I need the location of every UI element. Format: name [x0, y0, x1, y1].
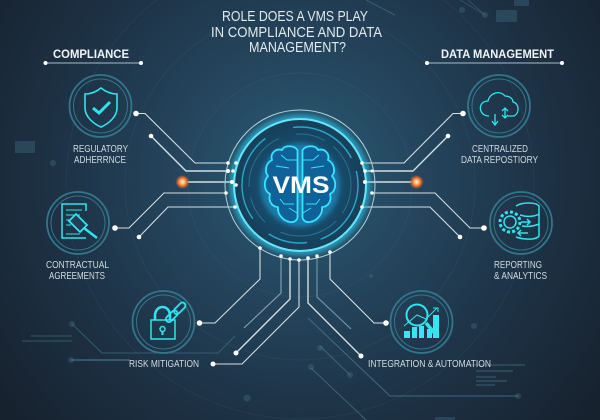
label: RISK MITIGATION [129, 358, 199, 370]
title: MANAGEMENT? [249, 39, 346, 56]
icon: shield with check [85, 88, 117, 127]
label [494, 259, 547, 282]
title [211, 8, 382, 56]
brain icon [265, 146, 335, 222]
label: & ANALYTICS [494, 270, 547, 282]
heading: compliance: COMPLIANCE [53, 49, 129, 61]
heading: data management: DATA MANAGEMENT [441, 49, 554, 61]
connector end dots [112, 111, 487, 366]
brain glow [260, 143, 340, 227]
label: AGREEMENTS [49, 270, 105, 282]
item: regulatory adherence [70, 75, 132, 166]
connector lines [115, 114, 484, 364]
item: centralized data repository [461, 75, 538, 166]
label [461, 143, 538, 166]
heading: compliance [44, 49, 143, 65]
title: IN COMPLIANCE AND DATA [211, 24, 382, 41]
item: risk mitigation [129, 291, 199, 370]
icon: cloud with arrows [480, 93, 518, 125]
icon: gear and database [500, 203, 539, 239]
VMS label: VMS [272, 172, 330, 199]
icon: padlock and chain link [151, 301, 187, 339]
label [46, 259, 109, 282]
label: REGULATORY [73, 143, 128, 155]
label: ADHERRNCE [74, 154, 126, 166]
icon: bar chart with magnifier [404, 304, 439, 338]
label: INTEGRATION & AUTOMATION [368, 358, 491, 370]
label: CONTRACTUAL [46, 259, 109, 271]
title: ROLE DOES A VMS PLAY [222, 8, 368, 25]
central VMS hub [225, 110, 375, 260]
label: CENTRALIZED [472, 143, 528, 155]
item: reporting and analytics [490, 192, 552, 282]
orange spark left [176, 175, 190, 189]
item: integration and automation [368, 291, 491, 370]
label: REPORTING [494, 259, 542, 271]
icon: document and gavel [62, 204, 97, 238]
label [73, 143, 128, 166]
orange spark right [410, 175, 424, 189]
label: DATA REPOSTIORY [461, 154, 538, 166]
heading: data management [425, 49, 564, 65]
item: contractual agreements [46, 192, 109, 282]
